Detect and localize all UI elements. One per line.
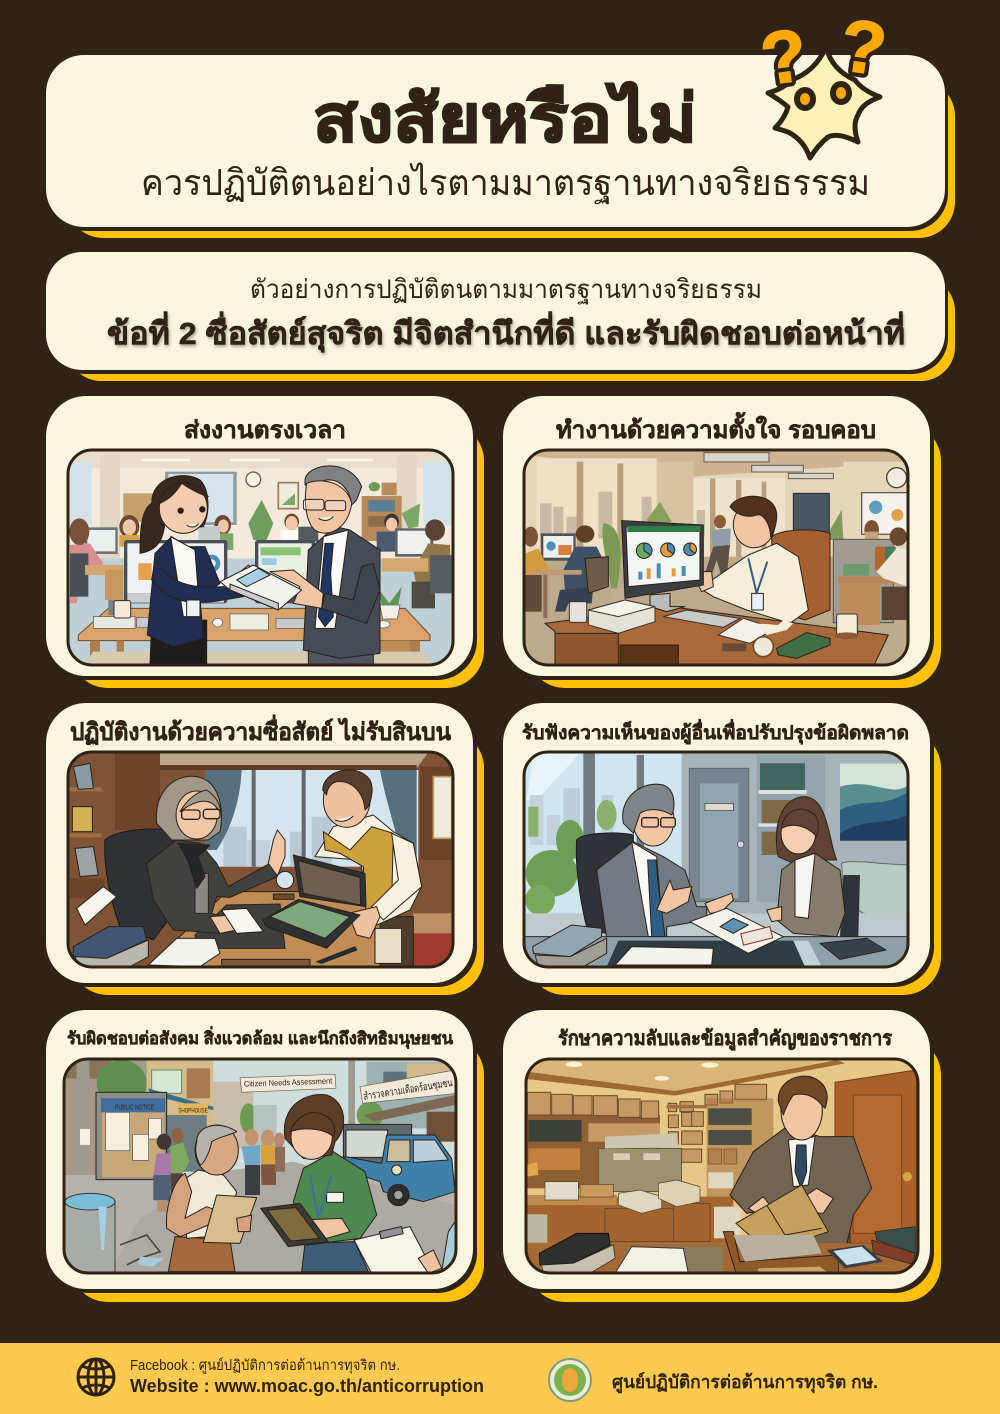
standard title: ข้อที่ 2 ซื่อสัตย์สุจริต มีจิตสำนึกที่ดี และรับผิดชอบต่อหน้าที่ <box>107 311 905 353</box>
report <box>690 908 783 953</box>
image border <box>68 752 453 967</box>
image border <box>524 450 908 665</box>
desk items <box>73 871 402 968</box>
monitor with charts <box>622 521 703 612</box>
card heading: ปฏิบัติงานด้วยความซื่อสัตย์ ไม่รับสินบน <box>70 714 452 746</box>
manager <box>270 466 380 665</box>
illustration: consultation <box>522 750 910 970</box>
image border <box>526 1059 918 1273</box>
image border <box>64 1059 456 1273</box>
background colleagues <box>523 515 908 625</box>
standard title shadow: ข้อที่ 2 ซื่อสัตย์สุจริต มีจิตสำนึกที่ดี และรับผิดชอบต่อหน้าที่ <box>108 313 906 355</box>
visitor offering briefcase <box>315 770 422 970</box>
panel: confidentiality <box>503 1010 941 1302</box>
filing cabinets <box>598 1133 682 1192</box>
chair <box>576 833 633 933</box>
card heading: ส่งงานตรงเวลา <box>184 417 346 444</box>
monitors <box>124 540 315 603</box>
panel: work diligently <box>503 396 941 688</box>
report book <box>220 565 302 610</box>
desk <box>545 607 888 667</box>
briefcase of cash <box>263 855 366 948</box>
notice board <box>80 1092 208 1180</box>
colleague <box>767 797 845 937</box>
panel: title <box>46 55 955 238</box>
footer <box>0 1343 1000 1414</box>
panel: honesty, no bribes <box>46 703 484 995</box>
illustration: careful analyst <box>522 448 910 668</box>
card heading: รับฟังความเห็นของผู้อื่นเพื่อปรับปรุงข้อผิดพลาด <box>522 719 909 745</box>
desk <box>78 587 432 666</box>
desk items <box>569 600 859 658</box>
icon: question burst <box>756 3 892 158</box>
desk items <box>533 925 886 967</box>
foreground desk <box>523 1227 920 1277</box>
envelope <box>736 1185 828 1252</box>
illustration: document room <box>523 1057 920 1277</box>
card heading: ทำงานด้วยความตั้งใจ รอบคอบ <box>556 411 876 444</box>
panel: social responsibility <box>46 1010 484 1302</box>
intro line: ตัวอย่างการปฏิบัติตนตามมาตรฐานทางจริยธรรม <box>250 274 762 305</box>
clipboard <box>354 1222 460 1278</box>
image border <box>68 450 453 665</box>
manager <box>597 784 733 938</box>
icon: right question mark: ? <box>835 3 892 91</box>
illustration: community survey <box>62 1057 460 1278</box>
card heading: รับผิดชอบต่อสังคม สิ่งแวดล้อม และนึกถึงสิทธิมนุษยชน <box>67 1026 453 1049</box>
icon: right question mark: ? <box>835 3 892 91</box>
illustration: handing over report <box>67 448 455 668</box>
desks and stacks <box>527 1162 741 1243</box>
leather chair <box>772 530 830 620</box>
icon: ministry seal <box>549 1359 591 1401</box>
panel: submit on time <box>46 396 484 688</box>
panel: listen to others <box>503 703 941 995</box>
desk <box>526 936 906 966</box>
illustration: refusing a bribe <box>67 750 455 970</box>
boxes and shelves <box>527 1084 773 1198</box>
icon: left question mark: ? <box>756 12 812 101</box>
image border <box>524 752 908 967</box>
website line: Website : www.moac.go.th/anticorruption <box>130 1376 484 1396</box>
woman officer <box>140 476 253 665</box>
elderly villager <box>166 1125 257 1272</box>
icon: right dot <box>833 84 849 102</box>
official refusing <box>147 776 285 933</box>
notice board: PUBLIC NOTICE <box>115 1102 154 1111</box>
icon: left dot <box>797 90 813 108</box>
villagers <box>153 1128 285 1212</box>
truck <box>343 1124 455 1206</box>
clerk <box>730 1076 872 1245</box>
analyst <box>692 496 808 623</box>
water barrel <box>65 1193 115 1275</box>
notice board: SHOPHOUSE <box>178 1108 208 1114</box>
desk <box>178 891 380 966</box>
panel: standard heading <box>46 252 955 381</box>
heading: main title: สงสัยหรือไม่ <box>313 81 697 155</box>
chair <box>105 829 173 940</box>
illustration: community survey: สำรวจความเดือดร้อนชุมชน <box>362 1076 454 1103</box>
subtitle: ควรปฏิบัติตนอย่างไรตามมาตรฐานทางจริยธรรรม <box>141 162 870 205</box>
icon: left question mark: ? <box>756 12 812 101</box>
card heading: รักษาความลับและข้อมูลสำคัญของราชการ <box>558 1027 892 1052</box>
surveyor <box>261 1095 377 1272</box>
facebook line: Facebook : ศูนย์ปฏิบัติการต่อต้านการทุจริต กษ. <box>130 1357 400 1374</box>
organisation name: ศูนย์ปฏิบัติการต่อต้านการทุจริต กษ. <box>612 1371 878 1394</box>
icon: globe <box>78 1359 114 1395</box>
door <box>835 1070 917 1243</box>
illustration: community survey: Citizen Needs Assessment <box>244 1077 333 1089</box>
background workers <box>69 500 452 608</box>
